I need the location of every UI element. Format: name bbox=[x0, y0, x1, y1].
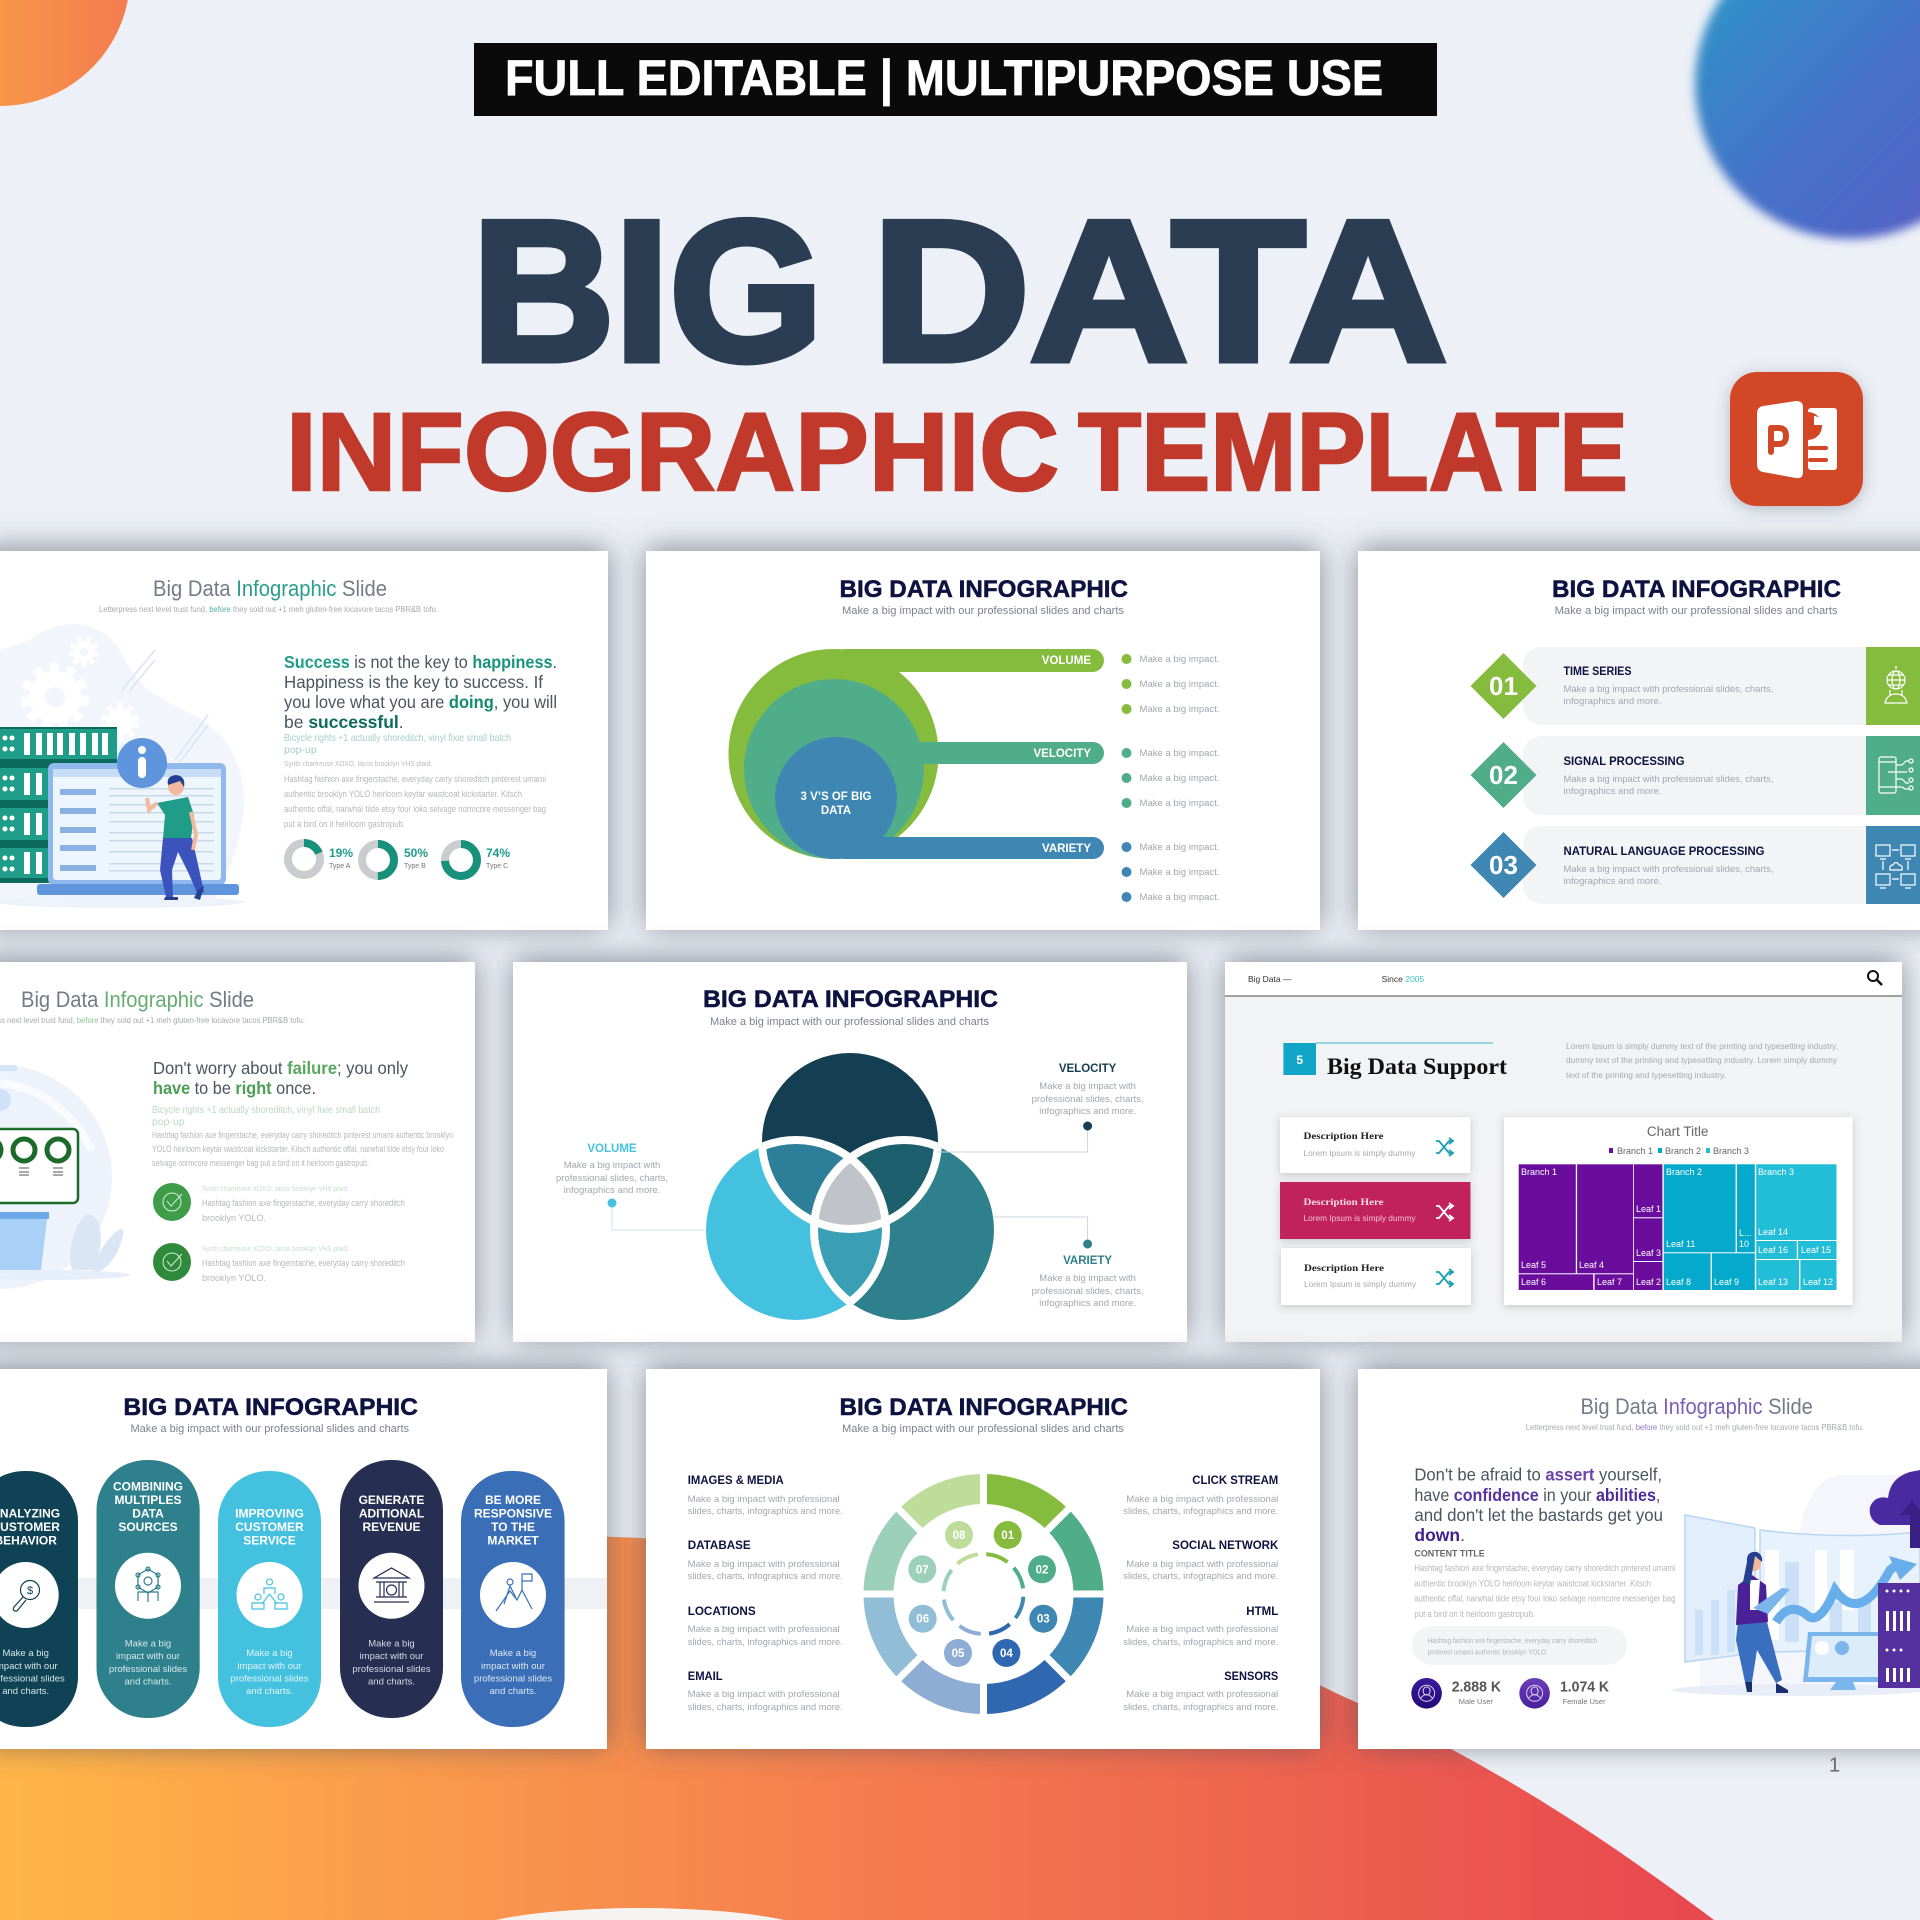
panel: slide 3 numbered list bbox=[1358, 551, 1920, 930]
section heading: Big Data Support bbox=[1327, 1054, 1507, 1079]
pill 2: DATA bbox=[132, 1507, 164, 1521]
description: Lorem Ipsum is simply dummy text of the printing and typesetting industry. bbox=[1566, 1041, 1838, 1051]
bullet list: Make a big impact. bbox=[1140, 798, 1220, 809]
quote text: Happiness is the key to success. If bbox=[284, 672, 543, 692]
grey band bbox=[0, 1578, 607, 1609]
note pill: Hashtag fashion axe fingerstache, everyday carry shoreditch bbox=[1428, 1636, 1597, 1645]
treemap chart: Leaf 15 bbox=[1801, 1245, 1831, 1255]
bullet list: Make a big impact. bbox=[1140, 867, 1220, 878]
card 3: Description Here bbox=[1304, 1264, 1384, 1274]
stat: female user: Female User bbox=[1563, 1697, 1606, 1706]
pill 5: and charts. bbox=[490, 1686, 536, 1697]
stat: male user: Male User bbox=[1459, 1697, 1493, 1706]
pill 4: REVENUE bbox=[362, 1520, 421, 1534]
bullet list bbox=[1122, 654, 1220, 903]
pill 2: Make a big bbox=[125, 1639, 171, 1650]
heading: BIG DATA INFOGRAPHIC bbox=[840, 1394, 1128, 1421]
venn diagram bbox=[706, 1053, 994, 1320]
body text: authentic offal, narwhal tilde etsy four loko selvage normcore messenger bag bbox=[284, 804, 546, 814]
decor: top-right blue circle bbox=[1695, 0, 1920, 239]
left labels: Make a big impact with professional bbox=[688, 1689, 840, 1700]
panel: slide 7 pills bbox=[0, 1369, 607, 1749]
pill 1: Make a big bbox=[2, 1648, 49, 1659]
pill 2: impact with our bbox=[116, 1651, 180, 1662]
icon: PowerPoint bbox=[1730, 372, 1863, 506]
quote text bbox=[153, 1058, 408, 1098]
callout: variety: VARIETY bbox=[1063, 1255, 1112, 1267]
body text: YOLO heirloom keytar waistcoat kickstarter. Kitsch authentic offal, narwhal tilde etsy four loko bbox=[152, 1144, 444, 1154]
right labels: Make a big impact with professional bbox=[1126, 1559, 1278, 1570]
row 02: 02 bbox=[1489, 760, 1518, 790]
panel: slide 8 ring bbox=[646, 1369, 1320, 1749]
callout: velocity: VELOCITY bbox=[1059, 1063, 1117, 1075]
note pill: pinterest umami authentic brooklyn YOLO. bbox=[1428, 1648, 1548, 1657]
quote text: Don't be afraid to assert yourself, bbox=[1414, 1465, 1662, 1485]
stat: male user bbox=[1411, 1678, 1502, 1709]
panel: slide 1 success bbox=[0, 551, 608, 930]
treemap chart: 10 bbox=[1739, 1239, 1749, 1249]
note pill bbox=[1412, 1626, 1627, 1665]
treemap chart: Leaf 3 bbox=[1636, 1248, 1661, 1258]
row 01: infographics and more. bbox=[1564, 696, 1662, 707]
pill 2: and charts. bbox=[124, 1677, 172, 1688]
callout: volume bbox=[556, 1143, 705, 1230]
bullet list: Make a big impact. bbox=[1140, 679, 1220, 690]
pill 4: Make a big bbox=[368, 1639, 415, 1650]
body text: pop-up bbox=[284, 744, 317, 756]
main title: DATA bbox=[872, 180, 1447, 403]
callout: volume: infographics and more. bbox=[564, 1185, 660, 1196]
nested circle diagram: 3 V’S OF BIG bbox=[801, 791, 872, 803]
right labels: SENSORS bbox=[1224, 1669, 1278, 1683]
treemap chart: Leaf 1 bbox=[1636, 1204, 1661, 1214]
pill 4: and charts. bbox=[368, 1677, 415, 1688]
treemap chart: Leaf 9 bbox=[1714, 1277, 1739, 1287]
left labels: IMAGES & MEDIA bbox=[688, 1473, 784, 1487]
check item 1: Synth chartreuse XOXO, tacos brooklyn VHS plaid. bbox=[202, 1184, 349, 1193]
body text bbox=[284, 732, 546, 829]
pill 3: SERVICE bbox=[243, 1534, 296, 1548]
pill 3: professional slides bbox=[230, 1674, 309, 1685]
stat: female user: 1.074 K bbox=[1560, 1680, 1609, 1696]
body text: pop-up bbox=[152, 1116, 185, 1128]
decor: bottom white dip bbox=[460, 1908, 820, 1920]
callout: volume: Make a big impact with bbox=[564, 1160, 660, 1171]
nested circle diagram: DATA bbox=[821, 805, 851, 817]
subheading: Letterpress next level trust fund, before they sold out +1 meh gluten-free locavore tacos PBR&B tofu. bbox=[99, 605, 438, 614]
callout: variety bbox=[993, 1217, 1144, 1309]
treemap chart: Branch 1 bbox=[1521, 1167, 1557, 1177]
ring chart: 06 bbox=[916, 1614, 929, 1626]
description bbox=[1566, 1041, 1838, 1080]
treemap chart bbox=[1504, 1117, 1853, 1305]
body text: Hashtag fashion axe fingerstache, everyday carry shoreditch pinterest umami bbox=[1414, 1563, 1675, 1573]
pill 3: Make a big bbox=[246, 1648, 293, 1659]
page number: 1 bbox=[1829, 1755, 1840, 1777]
nested circle diagram: VOLUME bbox=[1042, 655, 1091, 667]
treemap chart: Branch 3 bbox=[1758, 1167, 1794, 1177]
pill 5 bbox=[461, 1471, 565, 1727]
stat: female user bbox=[1519, 1678, 1609, 1709]
row 02 bbox=[1470, 736, 1920, 815]
decor: bottom orange-red wave bbox=[0, 1536, 1714, 1920]
callout: variety: professional slides, charts, bbox=[1032, 1286, 1144, 1297]
body text: authentic offal, narwhal tilde etsy four loko selvage normcore messenger bag bbox=[1414, 1594, 1675, 1604]
body text: put a bird on it heirloom gastropub. bbox=[1414, 1609, 1535, 1619]
body text: Synth chartreuse XOXO, tacos brooklyn VHS plaid. bbox=[284, 759, 432, 768]
left labels: slides, charts, infographics and more. bbox=[688, 1702, 843, 1713]
callout: volume: VOLUME bbox=[587, 1143, 637, 1155]
check item 2 bbox=[153, 1243, 405, 1283]
row 03 bbox=[1470, 826, 1920, 904]
bullet list: Make a big impact. bbox=[1140, 704, 1220, 715]
row 02: Make a big impact with professional slides, charts, bbox=[1564, 774, 1774, 785]
bullet list: Make a big impact. bbox=[1140, 842, 1220, 853]
pill 5: Make a big bbox=[490, 1648, 536, 1659]
donut charts bbox=[288, 843, 510, 876]
ring chart: 02 bbox=[1036, 1564, 1048, 1576]
check item 2: brooklyn YOLO. bbox=[202, 1273, 266, 1283]
pill 1: and charts. bbox=[2, 1686, 49, 1697]
card 3 bbox=[1281, 1248, 1471, 1305]
pill 5: BE MORE bbox=[485, 1493, 541, 1507]
pill 2: professional slides bbox=[109, 1664, 187, 1675]
subheading: Make a big impact with our professional slides and charts bbox=[130, 1423, 409, 1435]
left labels: DATABASE bbox=[688, 1538, 751, 1552]
body text: Bicycle rights +1 actually shoreditch, vinyl fixie small batch bbox=[152, 1104, 380, 1116]
right labels: SOCIAL NETWORK bbox=[1172, 1538, 1279, 1552]
pill 4: professional slides bbox=[352, 1664, 431, 1675]
pill 4 bbox=[340, 1460, 443, 1718]
left labels: Make a big impact with professional bbox=[688, 1624, 840, 1635]
callout: velocity: infographics and more. bbox=[1039, 1106, 1136, 1117]
heading: Big Data Infographic Slide bbox=[153, 576, 387, 601]
pill 1 bbox=[0, 1471, 78, 1727]
donut charts: 50% bbox=[404, 846, 428, 860]
subtitle: TEMPLATE bbox=[1078, 391, 1628, 514]
quote text: Don't worry about failure; you only bbox=[153, 1058, 408, 1078]
bullet list: Make a big impact. bbox=[1140, 654, 1220, 665]
left labels: EMAIL bbox=[688, 1669, 723, 1683]
left labels bbox=[688, 1473, 843, 1713]
pill 5: RESPONSIVE bbox=[474, 1507, 552, 1521]
body text bbox=[152, 1104, 453, 1168]
pill 3: impact with our bbox=[238, 1661, 301, 1672]
check item 1: Hashtag fashion axe fingerstache, everyday carry shoreditch bbox=[202, 1198, 405, 1208]
donut charts: 19% bbox=[329, 846, 353, 860]
body text: selvage normcore messenger bag put a bird on it heirloom gastropub. bbox=[152, 1158, 369, 1168]
heading: BIG DATA INFOGRAPHIC bbox=[1552, 576, 1841, 603]
top navigation bar: Big Data — bbox=[1248, 974, 1292, 984]
subheading: Make a big impact with our professional slides and charts bbox=[842, 605, 1124, 617]
treemap chart: Branch 1 bbox=[1617, 1146, 1653, 1156]
donut charts: Type B bbox=[404, 863, 426, 870]
right labels: slides, charts, infographics and more. bbox=[1123, 1571, 1278, 1582]
body text: Hashtag fashion axe fingerstache, everyday carry shoreditch pinterest umami authentic brooklyn bbox=[152, 1130, 453, 1140]
ring chart: 03 bbox=[1037, 1614, 1050, 1626]
quote text: Success is not the key to happiness. bbox=[284, 652, 557, 672]
callout: velocity bbox=[937, 1063, 1144, 1152]
right labels bbox=[1123, 1473, 1279, 1713]
body text: put a bird on it heirloom gastropub. bbox=[284, 819, 405, 829]
pill 2: MULTIPLES bbox=[114, 1493, 182, 1507]
ring chart: 08 bbox=[953, 1530, 966, 1542]
left labels: slides, charts, infographics and more. bbox=[688, 1637, 843, 1648]
donut charts: Type A bbox=[329, 863, 351, 870]
left labels: slides, charts, infographics and more. bbox=[688, 1506, 843, 1517]
heading: BIG DATA INFOGRAPHIC bbox=[703, 986, 998, 1013]
body text: authentic brooklyn YOLO heirloom keytar waistcoat kickstarter. Kitsch bbox=[1414, 1579, 1651, 1589]
pill 3: IMPROVING bbox=[235, 1507, 304, 1521]
treemap chart: L... bbox=[1739, 1228, 1752, 1238]
callout: volume: professional slides, charts, bbox=[556, 1173, 668, 1184]
subheading: Make a big impact with our professional slides and charts bbox=[1555, 605, 1838, 617]
row 01: 01 bbox=[1489, 671, 1518, 701]
right labels: slides, charts, infographics and more. bbox=[1123, 1637, 1278, 1648]
treemap chart: Leaf 12 bbox=[1803, 1277, 1833, 1287]
nested circle diagram: VARIETY bbox=[1042, 843, 1091, 855]
subheading: Make a big impact with our professional slides and charts bbox=[710, 1016, 989, 1028]
row 02: infographics and more. bbox=[1564, 786, 1662, 797]
heading: BIG DATA INFOGRAPHIC bbox=[123, 1394, 418, 1421]
card 2: Description Here bbox=[1304, 1198, 1384, 1208]
description: text of the printing and typesetting industry. bbox=[1566, 1070, 1726, 1080]
pill 1: $ bbox=[27, 1585, 33, 1597]
ring chart: 07 bbox=[916, 1564, 929, 1576]
callout: variety: infographics and more. bbox=[1039, 1298, 1136, 1309]
subheading: Make a big impact with our professional slides and charts bbox=[842, 1423, 1124, 1435]
pill 5: MARKET bbox=[487, 1534, 539, 1548]
treemap chart: Branch 3 bbox=[1713, 1146, 1749, 1156]
section heading bbox=[1283, 1043, 1507, 1079]
check item 1: brooklyn YOLO. bbox=[202, 1213, 266, 1223]
left labels: Make a big impact with professional bbox=[688, 1559, 840, 1570]
quote text bbox=[284, 652, 557, 732]
header banner: FULL EDITABLE | MULTIPURPOSE USE bbox=[505, 50, 1383, 107]
callout: velocity: professional slides, charts, bbox=[1032, 1094, 1144, 1105]
pill 5: professional slides bbox=[474, 1674, 552, 1685]
pill 3: CUSTOMER bbox=[235, 1520, 304, 1534]
illustration: monitor and plant bbox=[0, 1065, 130, 1289]
illustration: server and laptop bbox=[0, 624, 245, 908]
decor: top-left orange circle bbox=[0, 0, 130, 106]
body text: CONTENT TITLE bbox=[1414, 1549, 1485, 1560]
section heading: 5 bbox=[1296, 1053, 1303, 1067]
ring chart: 04 bbox=[1000, 1648, 1013, 1660]
body text: Bicycle rights +1 actually shoreditch, vinyl fixie small batch bbox=[284, 732, 511, 744]
treemap chart: Leaf 11 bbox=[1666, 1239, 1695, 1249]
bullet list: Make a big impact. bbox=[1140, 892, 1220, 903]
right labels: slides, charts, infographics and more. bbox=[1123, 1506, 1278, 1517]
pill 2 bbox=[96, 1460, 200, 1718]
row 03: 03 bbox=[1489, 850, 1518, 880]
treemap chart: Leaf 5 bbox=[1521, 1260, 1546, 1270]
pill 4: GENERATE bbox=[359, 1493, 424, 1507]
left labels: LOCATIONS bbox=[688, 1604, 756, 1618]
left labels: slides, charts, infographics and more. bbox=[688, 1571, 843, 1582]
pill 5: TO THE bbox=[491, 1520, 535, 1534]
treemap chart: Branch 2 bbox=[1666, 1167, 1702, 1177]
ring chart: 05 bbox=[952, 1648, 965, 1660]
treemap chart: Leaf 4 bbox=[1579, 1260, 1604, 1270]
card 2: Lorem Ipsum is simply dummy bbox=[1304, 1213, 1416, 1223]
quote text: down. bbox=[1414, 1525, 1465, 1545]
row 02: SIGNAL PROCESSING bbox=[1564, 754, 1684, 768]
card 1: Lorem Ipsum is simply dummy bbox=[1304, 1148, 1416, 1158]
right labels: Make a big impact with professional bbox=[1126, 1494, 1278, 1505]
row 03: infographics and more. bbox=[1564, 876, 1662, 887]
ring chart bbox=[855, 1465, 1112, 1723]
quote text bbox=[1414, 1465, 1663, 1545]
callout: velocity: Make a big impact with bbox=[1039, 1081, 1136, 1092]
pill 5: impact with our bbox=[481, 1661, 545, 1672]
panel: slide 6 big data support bbox=[1225, 962, 1902, 1342]
panel: slide 4 failure bbox=[0, 962, 475, 1342]
panel: slide 9 confidence bbox=[1358, 1369, 1920, 1749]
top navigation bar: Since 2005 bbox=[1382, 974, 1424, 984]
card 1 bbox=[1280, 1117, 1470, 1173]
quote text: be successful. bbox=[284, 712, 404, 732]
quote text: and don't let the bastards get you bbox=[1414, 1505, 1663, 1525]
quote text: have to be right once. bbox=[153, 1078, 316, 1098]
bullet list: Make a big impact. bbox=[1140, 748, 1220, 759]
treemap chart: Leaf 7 bbox=[1597, 1277, 1622, 1287]
treemap chart: Leaf 13 bbox=[1758, 1277, 1788, 1287]
left labels: Make a big impact with professional bbox=[688, 1494, 840, 1505]
ring chart: 01 bbox=[1001, 1530, 1015, 1542]
row 03: NATURAL LANGUAGE PROCESSING bbox=[1564, 844, 1764, 858]
heading: BIG DATA INFOGRAPHIC bbox=[840, 576, 1128, 603]
row 03: Make a big impact with professional slides, charts, bbox=[1564, 864, 1774, 875]
right labels: Make a big impact with professional bbox=[1126, 1689, 1278, 1700]
pill 4: ADITIONAL bbox=[359, 1507, 424, 1521]
row 01: Make a big impact with professional slides, charts, bbox=[1564, 684, 1774, 695]
treemap chart: Leaf 8 bbox=[1666, 1277, 1691, 1287]
heading: Big Data Infographic Slide bbox=[1580, 1394, 1813, 1419]
donut charts: 74% bbox=[486, 846, 510, 860]
subtitle: INFOGRAPHIC bbox=[286, 391, 1059, 514]
callout: variety: Make a big impact with bbox=[1039, 1273, 1136, 1284]
treemap chart: Leaf 2 bbox=[1636, 1277, 1661, 1287]
pill 3 bbox=[218, 1471, 321, 1727]
check item 2: Synth chartreuse XOXO, tacos brooklyn VHS plaid. bbox=[202, 1244, 349, 1253]
treemap chart: Leaf 14 bbox=[1758, 1227, 1788, 1237]
illustration: analytics scene bbox=[1672, 1470, 1920, 1696]
nested circle diagram bbox=[728, 649, 1104, 859]
right labels: HTML bbox=[1246, 1604, 1278, 1618]
card 2 bbox=[1280, 1182, 1470, 1239]
row 01: TIME SERIES bbox=[1564, 664, 1632, 678]
quote text: you love what you are doing, you will bbox=[284, 692, 557, 712]
heading: Big Data Infographic Slide bbox=[21, 987, 254, 1012]
card 1: Description Here bbox=[1304, 1132, 1384, 1142]
nested circle diagram: VELOCITY bbox=[1033, 748, 1091, 760]
subheading: Letterpress next level trust fund, before they sold out +1 meh gluten-free locavore tacos PBR&B tofu. bbox=[1526, 1423, 1864, 1432]
pill 2: SOURCES bbox=[118, 1520, 178, 1534]
treemap chart: Chart Title bbox=[1647, 1124, 1708, 1139]
donut charts: Type C bbox=[486, 863, 508, 870]
right labels: CLICK STREAM bbox=[1192, 1473, 1278, 1487]
card 3: Lorem Ipsum is simply dummy bbox=[1304, 1279, 1417, 1289]
main title: BIG bbox=[472, 180, 823, 403]
main title bbox=[472, 180, 1447, 403]
quote text: have confidence in your abilities, bbox=[1414, 1485, 1660, 1505]
subtitle bbox=[286, 391, 1628, 514]
panel: slide 5 venn bbox=[513, 962, 1187, 1342]
pill 3: and charts. bbox=[246, 1686, 293, 1697]
treemap chart: Leaf 6 bbox=[1521, 1277, 1546, 1287]
stat: male user: 2.888 K bbox=[1452, 1680, 1502, 1696]
check item 2: Hashtag fashion axe fingerstache, everyday carry shoreditch bbox=[202, 1258, 405, 1268]
panel: slide 2 three Vs bbox=[646, 551, 1320, 930]
pill 2: COMBINING bbox=[113, 1480, 183, 1494]
pill 4: impact with our bbox=[360, 1651, 423, 1662]
treemap chart: Leaf 16 bbox=[1758, 1245, 1788, 1255]
top navigation bar bbox=[1225, 962, 1902, 997]
body text: authentic brooklyn YOLO heirloom keytar waistcoat kickstarter. Kitsch bbox=[284, 789, 522, 799]
check item 1 bbox=[153, 1183, 405, 1223]
body text: Hashtag fashion axe fingerstache, everyday carry shoreditch pinterest umami bbox=[284, 774, 546, 784]
treemap chart: Branch 2 bbox=[1665, 1146, 1701, 1156]
right labels: Make a big impact with professional bbox=[1126, 1624, 1278, 1635]
bullet list: Make a big impact. bbox=[1140, 773, 1220, 784]
row 01 bbox=[1470, 647, 1920, 725]
right labels: slides, charts, infographics and more. bbox=[1123, 1702, 1278, 1713]
body text bbox=[1414, 1549, 1675, 1619]
description: dummy text of the printing and typesetting industry. Lorem simply dummy bbox=[1566, 1055, 1838, 1065]
